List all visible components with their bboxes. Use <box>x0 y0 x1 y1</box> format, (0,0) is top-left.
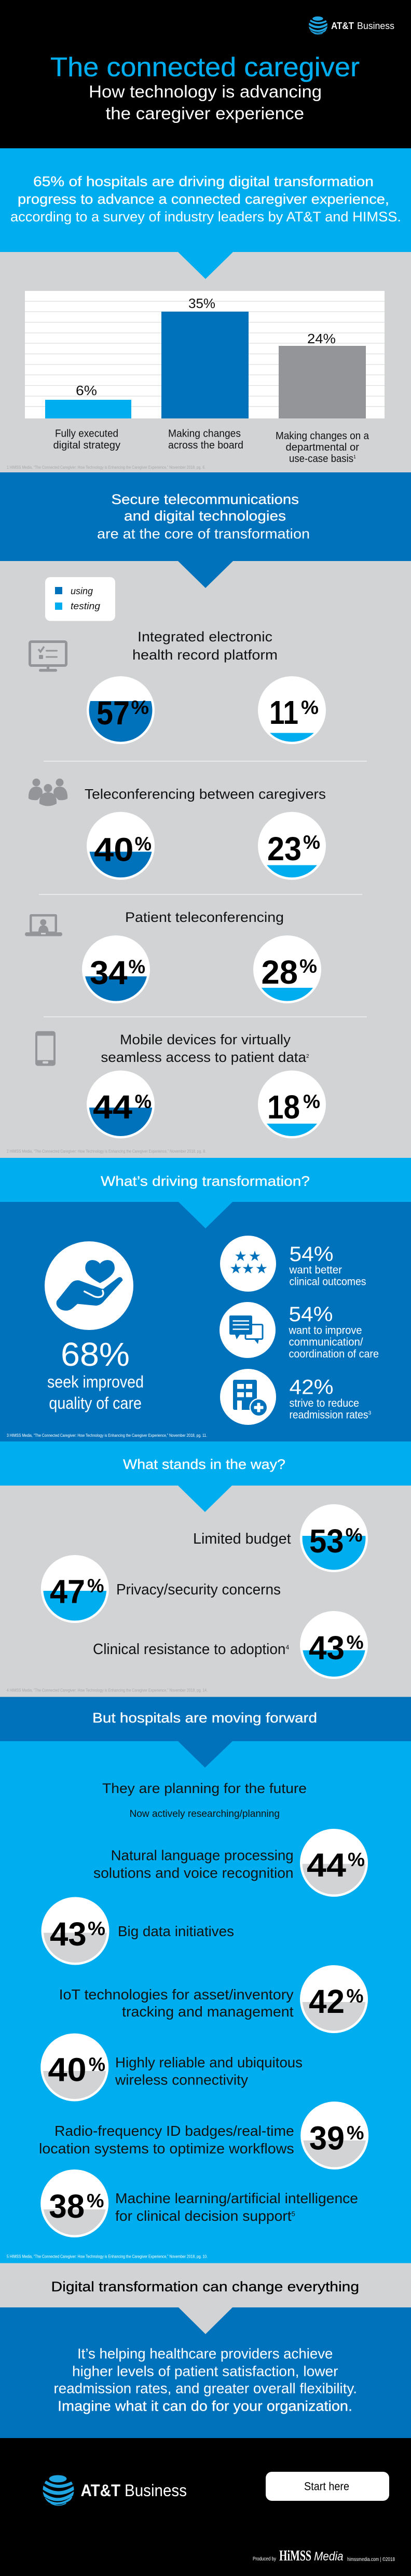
stat: 54% communication: coordination of care <box>289 1348 379 1360</box>
axis label: departmental: use-case basis <box>289 453 353 465</box>
subtitle <box>89 82 322 123</box>
subtitle: How technology is advancing <box>89 82 322 101</box>
icon: hospital with plus <box>220 1369 276 1425</box>
intro statement: progress to advance a connected caregiver experience, <box>18 191 389 207</box>
stat: 40% <box>40 2034 108 2103</box>
stat: 54% communication: 54% <box>289 1303 333 1326</box>
stat: 18% testing: % <box>303 1091 320 1112</box>
axis label: across the board <box>168 428 243 451</box>
stat: 40% using <box>87 812 155 883</box>
stat: 43% <box>42 1897 109 1965</box>
subheading: now researching: Now actively researching/planning <box>130 1809 280 1819</box>
stat: 53% <box>300 1504 368 1573</box>
stat: 40%: % <box>89 2054 105 2075</box>
icon: three people <box>29 779 67 806</box>
stat: 43% <box>300 1611 368 1682</box>
heading: planning for the future: They are planning for the future <box>102 1781 307 1796</box>
heading: integrated EHR: health record platform <box>132 647 278 663</box>
label: machine learning: for clinical decision support <box>115 2208 292 2224</box>
closing statement <box>54 2346 357 2414</box>
stat: 54% communication: communication/ <box>289 1336 363 1348</box>
stat: 34% using <box>82 935 150 1007</box>
subtitle: the caregiver experience <box>106 104 304 123</box>
icon: AT&T globe logo <box>308 16 328 35</box>
panel: drivers <box>0 1202 411 1441</box>
stat: 68% improved quality: quality of care <box>49 1394 142 1412</box>
closing statement: Imagine what it can do for your organization. <box>58 2398 352 2414</box>
heading: integrated EHR: Integrated electronic <box>138 629 272 645</box>
panel: intro band <box>0 148 411 252</box>
axis label: departmental: departmental or <box>285 442 359 453</box>
stat: 40%: 40 <box>48 2051 87 2089</box>
heading: mobile devices <box>101 1032 309 1065</box>
panel: digital transformation band <box>0 2263 411 2307</box>
intro statement: 65% of hospitals are driving digital transformation <box>33 174 374 189</box>
section heading: but hospitals are moving forward: But hospitals are moving forward <box>92 1710 317 1726</box>
icon: AT&T globe logo large <box>42 2474 75 2505</box>
logo text: AT&T Business: Business <box>357 21 394 31</box>
label: RFID badges <box>39 2123 294 2157</box>
panel: driving band <box>0 1158 411 1202</box>
footnote 3: 3 HIMSS Media, “The Connected Caregiver: How Technology is Enhancing the Caregiver Experience,” November 2018, pg. 11. <box>7 1433 207 1438</box>
label: wireless connectivity: wireless connectivity <box>115 2072 248 2088</box>
stat: 23% testing: 23 <box>267 830 302 867</box>
arrow: drivers pointer <box>179 1202 232 1228</box>
label: IoT technologies: tracking and management <box>122 2004 294 2020</box>
label: limited budget: Limited budget <box>193 1531 291 1547</box>
section heading: secure telecommunications: and digital technologies <box>124 508 286 524</box>
label: IoT technologies <box>59 1986 294 2020</box>
stat: 42% readmission <box>290 1376 372 1421</box>
panel: technologies band <box>0 472 411 561</box>
stat: 54% clinical outcomes <box>289 1243 366 1288</box>
stat: 42%: 42 <box>309 1983 345 2020</box>
logo text: AT&T Business: AT&T <box>81 2481 120 2500</box>
logo text: AT&T Business <box>331 21 394 31</box>
stat: 43%: 43 <box>309 1629 345 1667</box>
stat: 42% readmission: strive to reduce <box>290 1397 359 1409</box>
section heading: secure telecommunications <box>97 492 310 541</box>
stat: 38%: % <box>87 2190 104 2211</box>
closing statement: higher levels of patient satisfaction, lower <box>72 2363 338 2379</box>
logo text: AT&T Business: Business <box>125 2481 187 2500</box>
stat: 57% using: 57 <box>97 694 130 732</box>
axis label: departmental: 1 <box>353 454 356 459</box>
icon: hand holding heart <box>45 1241 133 1330</box>
bar: across the board <box>161 312 249 418</box>
logo text: AT&T Business <box>81 2481 187 2500</box>
stat: 44% using: 44 <box>93 1088 132 1126</box>
legend: using <box>71 586 93 596</box>
stat: 23% testing: % <box>303 832 320 853</box>
arrow: planning pointer <box>178 1741 232 1768</box>
label: RFID badges: Radio-frequency ID badges/real-time <box>54 2123 294 2139</box>
axis label: fully executed: Fully executed <box>55 428 118 440</box>
stat: 42% readmission: 42% <box>290 1376 333 1399</box>
value 24%: 24% <box>307 331 336 346</box>
stat: 28% testing: % <box>299 956 317 977</box>
heading: mobile devices: 2 <box>306 1054 309 1059</box>
stat: 42% readmission: readmission rates <box>290 1409 368 1421</box>
panel: moving forward band <box>0 1697 411 1741</box>
section heading: what stands in the way: What stands in the way? <box>123 1457 285 1472</box>
axis label: across the board: across the board <box>168 440 243 451</box>
intro statement <box>10 174 401 225</box>
axis label: departmental: Making changes on a <box>276 430 369 442</box>
stat: 40% using: 40 <box>94 831 134 868</box>
intro statement: according to a survey of industry leaders by AT&T and HIMSS. <box>10 209 401 225</box>
label: wireless connectivity: Highly reliable and ubiquitous <box>115 2054 303 2070</box>
icon: five stars <box>220 1236 276 1292</box>
stat: 38%: 38 <box>49 2188 85 2225</box>
stat: 47%: 47 <box>50 1573 85 1611</box>
stat: 47% <box>41 1555 109 1626</box>
stat: 34% using: 34 <box>90 954 128 991</box>
stat: 11% testing: % <box>301 697 319 718</box>
button: start here: Start here <box>304 2480 349 2493</box>
stat: 23% testing <box>258 812 326 880</box>
label: privacy/security concerns: Privacy/security concerns <box>116 1581 281 1598</box>
panel: progress chart <box>0 252 411 472</box>
producer credit <box>253 2548 395 2564</box>
stat: 11% testing: 11 <box>269 694 298 731</box>
legend <box>45 577 115 621</box>
closing statement: It’s helping healthcare providers achieve <box>77 2346 333 2362</box>
stat: 54% clinical outcomes: clinical outcomes <box>290 1276 366 1288</box>
panel: obstacles <box>0 1486 411 1697</box>
stat: 44% <box>300 1829 368 1897</box>
button: start here <box>266 2472 389 2501</box>
panel: header <box>0 0 411 148</box>
stat: 53%: 53 <box>309 1522 344 1560</box>
label: natural language processing: solutions and voice recognition <box>93 1865 294 1881</box>
panel: footer <box>0 2438 411 2576</box>
stat: 44%: 44 <box>307 1846 346 1884</box>
footnote 4: 4 HIMSS Media, “The Connected Caregiver: How Technology is Enhancing the Caregiver Experience,” November 2018, pg. 14. <box>7 1688 208 1693</box>
title: The connected caregiver <box>50 52 360 82</box>
stat: 68% improved quality: 68% <box>61 1336 130 1373</box>
label: IoT technologies: IoT technologies for asset/inventory <box>59 1986 294 2003</box>
axis label: fully executed: digital strategy <box>53 440 120 451</box>
footnote 5: 5 HIMSS Media, “The Connected Caregiver: How Technology is Enhancing the Caregiver Experience,” November 2018, pg. 10. <box>7 2255 208 2259</box>
panel: closing <box>0 2307 411 2438</box>
section heading: what's driving transformation: What’s driving transformation? <box>101 1173 310 1189</box>
stat: 18% testing <box>258 1070 326 1139</box>
producer credit: Media <box>314 2550 344 2564</box>
section heading: secure telecommunications: are at the core of transformation <box>97 526 310 541</box>
stat: 44% using: % <box>135 1091 152 1112</box>
stat: 38% <box>40 2169 108 2239</box>
stat: 54% communication <box>289 1303 379 1360</box>
stat: 44% using <box>87 1070 155 1139</box>
arrow: technologies pointer <box>178 561 233 588</box>
bar chart <box>25 291 385 418</box>
stat: 39% <box>300 2102 368 2172</box>
stat: 54% clinical outcomes: want better <box>289 1264 342 1276</box>
value 35%: 35% <box>188 296 215 311</box>
label: machine learning: Machine learning/artificial intelligence <box>115 2190 358 2206</box>
stat: 42%: % <box>347 1985 363 2007</box>
bar: fully executed <box>45 400 131 418</box>
heading: teleconferencing between caregivers: Teleconferencing between caregivers <box>85 786 326 802</box>
stat: 40% using: % <box>135 833 152 855</box>
stat: 18% testing: 18 <box>267 1088 300 1126</box>
label: machine learning <box>115 2190 358 2224</box>
closing statement: readmission rates, and greater overall flexibility. <box>54 2381 357 2397</box>
stat: 39%: 39 <box>309 2120 345 2157</box>
footnote 2: 2 HIMSS Media, “The Connected Caregiver: How Technology is Enhancing the Caregiver Experience,” November 2018, pg. 8. <box>7 1149 206 1154</box>
producer credit: HiMSS <box>279 2548 311 2564</box>
stat: 28% testing: 28 <box>262 954 298 991</box>
stat: 43%: 43 <box>50 1915 87 1953</box>
icon: smartphone <box>35 1031 56 1066</box>
axis label: across the board: Making changes <box>168 428 241 440</box>
icon: chat bubbles <box>220 1302 276 1358</box>
stat: 57% using: % <box>131 697 149 718</box>
axis label: departmental <box>276 430 369 465</box>
stat: 28% testing <box>253 935 321 1006</box>
label: clinical resistance: Clinical resistance to adoption <box>93 1641 285 1658</box>
stat: 42% <box>300 1965 368 2034</box>
arrow: obstacles pointer <box>178 1486 232 1512</box>
arrow: intro pointer <box>178 252 233 279</box>
section heading: digital transformation: Digital transformation can change everything <box>51 2279 359 2294</box>
bar: departmental <box>279 346 366 418</box>
axis label: fully executed <box>53 428 120 451</box>
label: wireless connectivity <box>115 2054 303 2088</box>
label: RFID badges: location systems to optimize workflows <box>39 2140 294 2157</box>
stat: 11% testing <box>258 676 326 749</box>
stat: 43%: % <box>88 1918 105 1939</box>
icon: laptop with person <box>25 914 62 936</box>
label: clinical resistance: 4 <box>285 1644 290 1651</box>
stat: 34% using: % <box>129 956 145 977</box>
label: machine learning: 5 <box>292 2210 295 2218</box>
stat: 53%: % <box>346 1524 363 1546</box>
label: natural language processing: Natural language processing <box>111 1847 294 1864</box>
stat: 54% communication: want to improve <box>289 1324 362 1337</box>
section heading: secure telecommunications: Secure telecommunications <box>111 492 299 507</box>
icon: monitor checklist <box>30 642 66 672</box>
footnote 1: 1 HIMSS Media, “The Connected Caregiver: How Technology is Enhancing the Caregiver Experience,” November 2018, pg. 6. <box>7 465 206 470</box>
producer credit: himssmedia.com | ©2018 <box>347 2557 395 2563</box>
producer credit: Produced by <box>253 2556 276 2562</box>
label: big data: Big data initiatives <box>118 1923 234 1939</box>
stat: 47%: % <box>87 1575 104 1597</box>
panel: technologies <box>0 561 411 1158</box>
stat: 42% readmission: 3 <box>368 1410 372 1416</box>
panel: planning <box>0 1741 411 2263</box>
stat: 43%: % <box>347 1632 364 1653</box>
stat: 68% improved quality: seek improved <box>47 1373 144 1391</box>
heading: integrated EHR <box>132 629 278 663</box>
legend: testing <box>71 601 100 611</box>
arrow: closing pointer <box>179 2307 232 2334</box>
stat: 44%: % <box>348 1849 365 1870</box>
logo text: AT&T Business: AT&T <box>331 21 354 31</box>
value 6%: 6% <box>76 383 97 398</box>
heading: mobile devices: Mobile devices for virtually <box>120 1032 291 1047</box>
panel: obstacles band <box>0 1441 411 1486</box>
stat: 68% improved quality <box>47 1336 144 1412</box>
stat: 39%: % <box>347 2122 364 2144</box>
label: natural language processing <box>93 1847 294 1881</box>
stat: 57% using <box>87 676 155 748</box>
heading: mobile devices: seamless access to patient data <box>101 1049 307 1065</box>
stat: 54% clinical outcomes: 54% <box>290 1243 333 1266</box>
heading: patient teleconferencing: Patient teleconferencing <box>125 909 284 925</box>
